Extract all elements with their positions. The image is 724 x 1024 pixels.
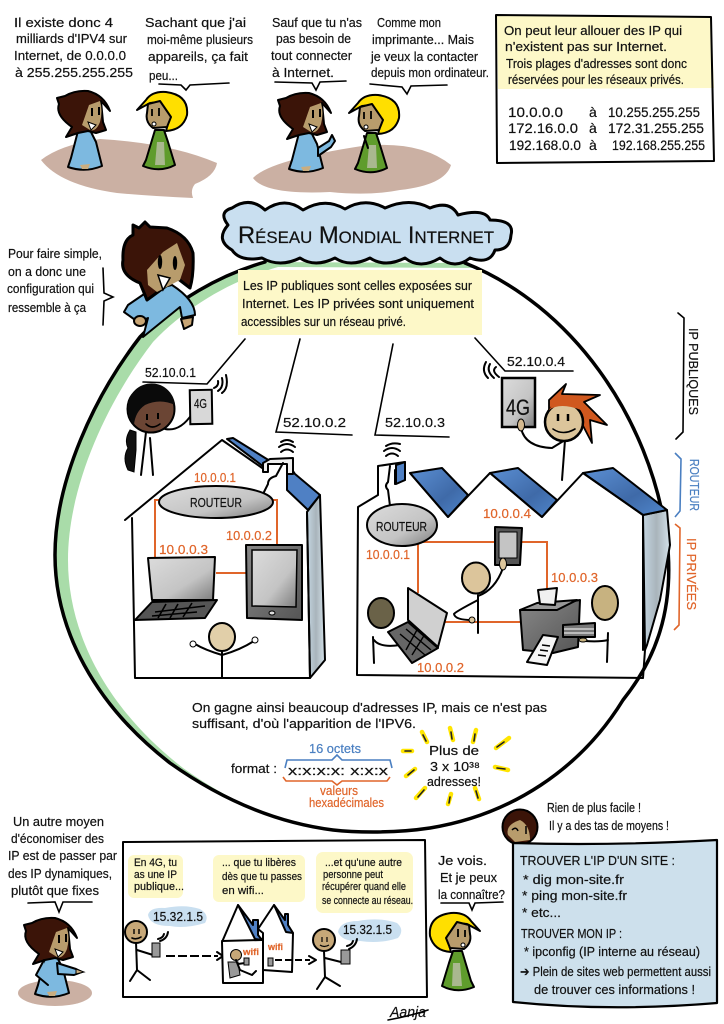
blue roof right band: [287, 462, 320, 510]
address table: à: [589, 120, 597, 136]
ip labels: 10.0.0.1: [194, 470, 236, 485]
explanation text: n'existent pas sur Internet.: [505, 39, 667, 54]
address table: 10.0.0.0: [508, 104, 563, 120]
panel: dynamic IP scenario: [123, 840, 427, 997]
big circle: internet: [55, 262, 682, 837]
house: office network: 10.0.0.4: [483, 506, 531, 521]
note 3: se connecte au réseau.: [322, 895, 413, 907]
address table: 192.168.0.0: [509, 137, 581, 153]
house: home network: 10.0.0.3: [159, 542, 208, 557]
frame: [123, 840, 427, 997]
speech text: four billion addresses: Il existe donc 4: [14, 15, 113, 30]
house: office network: [357, 443, 670, 678]
note 1: publique...: [134, 881, 184, 893]
explanation text: [504, 23, 687, 87]
speech text: four billion addresses: milliards d'IPV4 sur: [16, 31, 128, 46]
character: large brunette on the arc: [123, 222, 195, 337]
ground patch: [253, 145, 451, 194]
character: brunette peeking over box: [502, 810, 538, 844]
leader line: 52.10.0.4: 52.10.0.4: [507, 354, 565, 369]
wifi: [384, 443, 400, 456]
ground patch: [41, 139, 217, 198]
note 2: [213, 855, 305, 902]
IPv6 format diagram: x:x:x:x: x:x:x: [288, 763, 389, 778]
speech text: no need to connect: à Internet.: [272, 65, 334, 80]
address table: 10.255.255.255: [608, 104, 700, 120]
speech text: printer: depuis mon ordinateur.: [371, 65, 489, 80]
cable: [386, 466, 390, 506]
dashed arrow: [166, 955, 218, 957]
address table: à: [589, 137, 597, 153]
list: site IP: * etc...: [522, 905, 561, 920]
house outline: [125, 440, 310, 678]
tablet: [502, 378, 535, 427]
heading: site IP: TROUVER L'IP D'UN SITE :: [520, 853, 675, 868]
arrowhead 2: [309, 956, 316, 964]
starburst: address count: Plus de: [429, 743, 479, 758]
IPv6 format diagram: valeurs: [320, 783, 358, 798]
speech: je vois: [438, 853, 505, 910]
cable: [264, 463, 283, 492]
speech text: four billion addresses: à 255.255.255.255: [15, 65, 133, 80]
chair in back house: [268, 958, 273, 966]
leader line: 52.10.0.2: [276, 339, 352, 435]
leader line: 52.10.0.3: 52.10.0.3: [385, 415, 445, 430]
speech tail: [159, 83, 229, 90]
intro text with brace: [7, 246, 113, 325]
signature: Aanja: [389, 1004, 426, 1021]
stick person: [190, 623, 258, 678]
house: office network: 10.0.0.3: [551, 570, 598, 585]
address table: à: [589, 104, 597, 120]
panel: finding IP: [513, 840, 717, 1007]
character: woman with 4G tablet: 4G: [194, 396, 207, 411]
character: blond thinking: [349, 95, 399, 172]
leader line: 52.10.0.2: 52.10.0.2: [283, 415, 346, 430]
speech text: four billion addresses: [14, 15, 133, 80]
speech text: no need to connect: pas besoin de: [276, 31, 351, 46]
side label: public IP: [676, 313, 701, 439]
note: public and private IP: Internet. Les IP privées sont uniquement: [242, 296, 474, 311]
houses with wifi: wifi: [267, 942, 283, 952]
speech: easy: Il y a des tas de moyens !: [549, 818, 669, 833]
tablet: [190, 390, 212, 424]
house: office network: ROUTEUR: [376, 519, 427, 534]
chimney cap: [396, 462, 405, 484]
speech text: printer: je veux la contacter: [370, 49, 479, 64]
house: home network: 10.0.0.2: [226, 528, 272, 543]
box outline: [496, 15, 714, 163]
address table: 192.168.255.255: [612, 137, 705, 153]
wifi: [279, 440, 295, 452]
seated person: [228, 962, 240, 978]
circle outline: [55, 262, 669, 832]
list: site IP: [522, 872, 628, 920]
router: [159, 486, 273, 518]
side label: private IP: IP PRIVÉES: [684, 538, 699, 610]
starburst: address count: adresses!: [427, 774, 481, 789]
speech text: no need to connect: tout connecter: [271, 48, 353, 63]
chimney: [263, 458, 293, 474]
leader line: 52.10.0.1: [143, 339, 245, 384]
dashed arrow 2: [275, 959, 310, 961]
explanation text: réservées pour les réseaux privés.: [508, 72, 684, 87]
cloud: title: [222, 202, 512, 264]
head: [545, 403, 583, 441]
green crescent: [55, 262, 669, 832]
list: my IP: de trouver ces informations !: [534, 982, 695, 997]
character: brunette waving: [278, 93, 335, 172]
explanation text: On peut leur allouer des IP qui: [504, 23, 682, 38]
note: public and private IP: accessibles sur un réseau privé.: [241, 314, 406, 329]
IP cloud 2: 15.32.1.5: [343, 922, 392, 937]
panel: comic 2: [253, 15, 489, 194]
note 2: ... que tu libères: [222, 857, 296, 869]
speech text: printer: imprimante... Mais: [372, 32, 474, 47]
speech: easy: Rien de plus facile !: [547, 800, 641, 815]
stick figure with phone 2: [313, 929, 357, 989]
IPv6 format diagram: format :: [231, 761, 277, 776]
address table: 172.16.0.0: [508, 120, 578, 136]
text: dynamic IP: [8, 814, 118, 912]
braid: [125, 430, 136, 472]
speech text: printer: Comme mon: [377, 15, 441, 30]
router: [367, 504, 437, 546]
wifi: [489, 364, 499, 378]
speech text: several devices: appareils, ça fait: [148, 49, 248, 64]
IP cloud 2: [338, 919, 401, 942]
note 1: [128, 855, 184, 898]
IPv6 format diagram: hexadécimales: [309, 795, 384, 810]
text: dynamic IP: plutôt que fixes: [11, 883, 99, 898]
text: IPv6 conclusion: On gagne ainsi beaucoup d'adresses IP, mais ce n'est pas: [192, 700, 548, 715]
body: [141, 414, 192, 475]
side label: router: ROUTEUR: [687, 459, 702, 511]
speech text: several devices: peu...: [149, 68, 178, 83]
wifi: [214, 375, 227, 393]
address table: 172.31.255.255: [608, 120, 704, 136]
small tablet and person: [454, 527, 522, 633]
leader line: 52.10.0.3: [375, 344, 449, 437]
laptop: [135, 557, 217, 620]
front house: [222, 905, 263, 983]
house: home network: ROUTEUR: [190, 495, 242, 510]
IPv6 format diagram: 16 octets: [309, 741, 361, 756]
intro text with brace: on a donc une: [8, 264, 86, 279]
blue roof panels: [410, 468, 468, 517]
speech text: several devices: moi-même plusieurs: [147, 32, 253, 47]
panel: private address ranges: [496, 15, 714, 163]
character: brunette pointing: [18, 918, 92, 1006]
leader line: 52.10.0.4: [475, 338, 573, 371]
character: blond facing right: [430, 913, 480, 990]
printer and user: [520, 586, 618, 665]
starburst: address count: 3 x 10³⁸: [430, 759, 480, 774]
list: my IP: * ipconfig (IP interne au réseau): [524, 944, 700, 959]
orange links: [418, 542, 547, 622]
speech text: no need to connect: Sauf que tu n'as: [272, 15, 362, 30]
intro text with brace: Pour faire simple,: [8, 246, 102, 261]
address table: [508, 104, 705, 153]
character: brunette: [57, 91, 110, 170]
side label: router: [675, 453, 702, 517]
side label: private IP: [674, 524, 699, 630]
list: site IP: * ping mon-site.fr: [522, 888, 628, 903]
houses with wifi: wifi: [242, 947, 259, 957]
heading: my IP: TROUVER MON IP :: [521, 926, 622, 941]
note: public and private IP: Les IP publiques sont celles exposées sur: [243, 278, 473, 293]
house: office network: 10.0.0.2: [417, 660, 464, 675]
ip labels: 10.0.0.1: [366, 547, 410, 562]
speech: je vois: la connaître?: [438, 887, 505, 902]
speech tail: [370, 84, 447, 94]
side label: public IP: IP PUBLIQUES: [686, 328, 701, 415]
house: home network: [125, 438, 325, 678]
speech text: no need to connect: [271, 15, 362, 80]
speech text: four billion addresses: Internet, de 0.0.0.0: [14, 48, 126, 63]
text: dynamic IP: d'économiser des: [11, 831, 104, 846]
character: red-haired man with 4G tablet: [484, 362, 607, 480]
side wall: [307, 495, 325, 678]
laptop user: [368, 588, 447, 663]
tablet: [246, 545, 302, 620]
blue roof left band: [227, 438, 270, 467]
heading: Réseau Mondial Internet: [238, 222, 494, 249]
note 1: En 4G, tu: [134, 857, 177, 869]
character: red-haired man with 4G tablet: 4G: [506, 395, 530, 420]
text: IPv6 conclusion: [192, 700, 548, 731]
speech text: printer: [370, 15, 489, 80]
speech: je vois: Et je peux: [440, 870, 497, 885]
text: dynamic IP: Un autre moyen: [13, 814, 104, 829]
IPv6 format diagram: [231, 741, 392, 810]
note 3: récupérer quand elle: [322, 881, 406, 893]
speech tail: [275, 81, 346, 90]
arrowhead: [217, 952, 223, 960]
speech text: several devices: Sachant que j'ai: [145, 15, 246, 30]
note 1: as une IP: [134, 869, 177, 881]
character: woman with 4G tablet: [125, 375, 227, 475]
starburst: address count: [403, 728, 509, 804]
arm and body: [521, 428, 565, 448]
houses with wifi: [222, 905, 293, 983]
IP cloud 1: [148, 906, 207, 927]
hair: [549, 384, 607, 443]
side wall: [643, 510, 670, 650]
building outline: [357, 462, 645, 678]
intro text with brace: configuration qui: [7, 281, 94, 296]
note: public and private IP: [238, 270, 482, 335]
note 2: en wifi...: [222, 885, 264, 897]
note 3: [316, 852, 413, 913]
back house: [258, 905, 293, 972]
text: dynamic IP: IP est de passer par: [8, 848, 118, 863]
note 3: personne peut: [323, 869, 383, 881]
intro text with brace: ressemble à ça: [8, 300, 87, 315]
panel: comic 1: [14, 15, 253, 198]
head: [128, 386, 174, 432]
orange links: [155, 500, 277, 573]
speech: easy: [547, 800, 669, 833]
explanation text: Trois plages d'adresses sont donc: [506, 56, 687, 71]
IP cloud 1: 15.32.1.5: [153, 909, 203, 924]
note 2: dès que tu passes: [222, 871, 302, 883]
list: site IP: * dig mon-site.fr: [523, 872, 625, 887]
stick figure with phone 1: [125, 921, 168, 981]
text: dynamic IP: des IP dynamiques,: [8, 866, 112, 881]
note background: [497, 15, 714, 89]
speech text: several devices: [145, 15, 253, 83]
note 3: ...et qu'une autre: [325, 857, 402, 869]
speech: je vois: Je vois.: [438, 853, 487, 868]
leader line: 52.10.0.1: 52.10.0.1: [145, 365, 196, 380]
character: blond: [137, 92, 187, 169]
list: my IP: [520, 944, 711, 997]
text: IPv6 conclusion: suffisant, d'où l'apparition de l'IPV6.: [192, 716, 416, 731]
